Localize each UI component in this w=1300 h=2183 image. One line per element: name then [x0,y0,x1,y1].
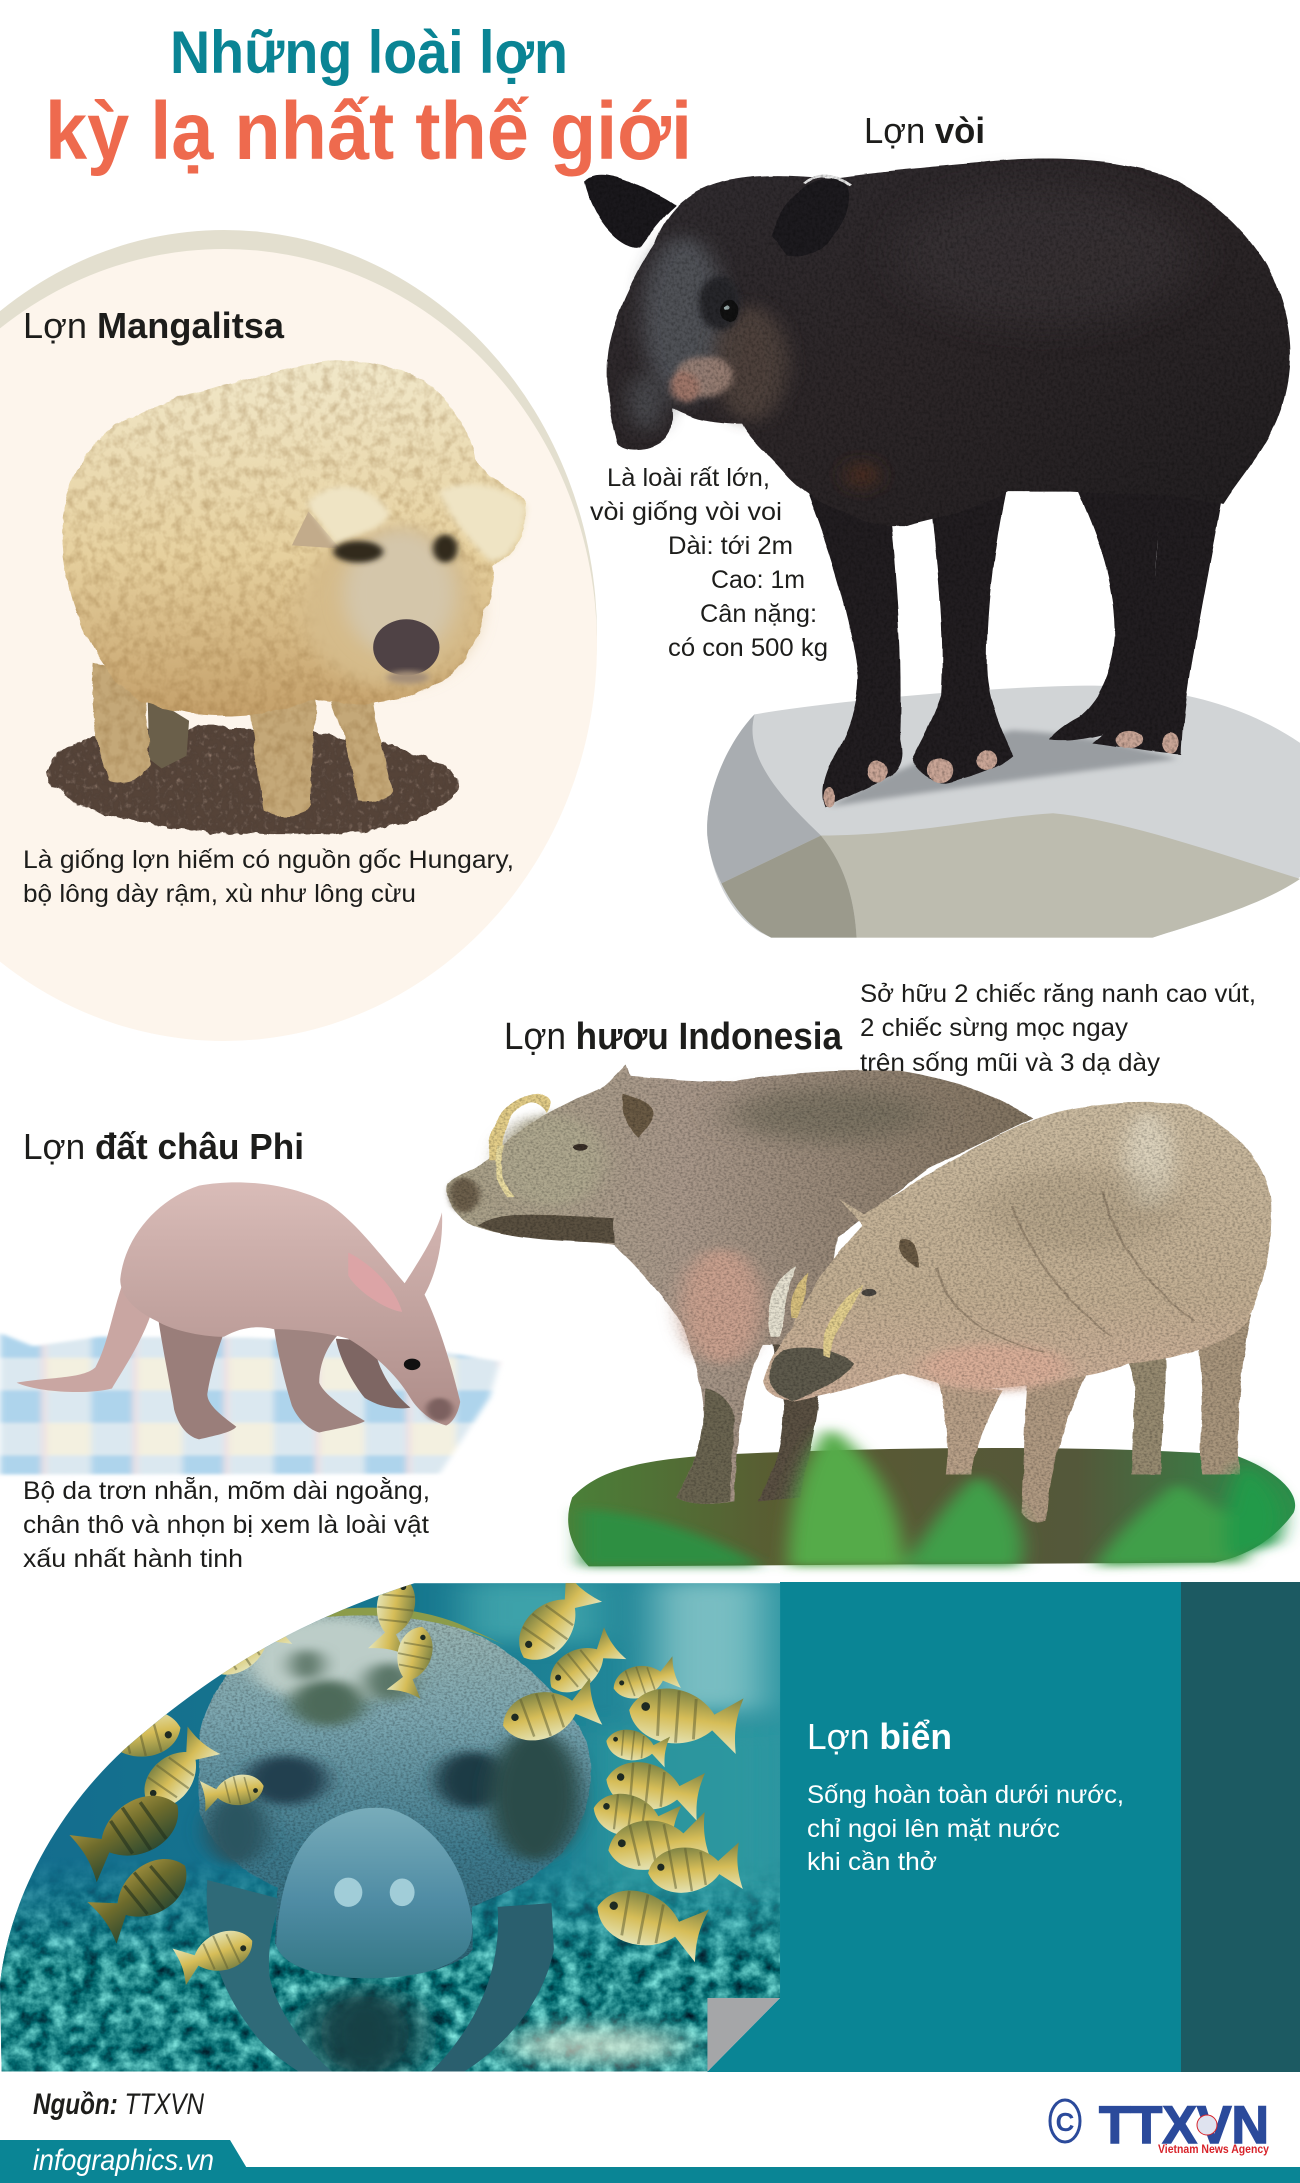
tagline: Vietnam News Agency [1158,2142,1269,2156]
ground [48,727,457,835]
illustration: Mangalitsa pig [48,360,527,835]
site name: infographics.vn [33,2144,214,2177]
footer bar [0,2140,1300,2183]
heading: Lợn biển: Lợn biển [807,1716,952,1757]
details [477,1215,614,1243]
blurred foreground leaves [580,1427,1283,1566]
nostrils [334,1878,415,1907]
text: aardvark description: Bộ da trơn nhẵn, mõm dài ngoằng, [23,1476,430,1505]
blanket [0,1333,500,1475]
wool body [62,360,527,716]
illustration: babirusa pair [447,1065,1295,1566]
aardvark ear, eye, shading [348,1253,453,1421]
text: Mangalitsa description: bộ lông dày rậm, xù như lông cừu [23,880,416,908]
flippers [207,1880,554,2072]
water [0,1580,780,2072]
light rays [307,1580,779,2080]
text: manatee description: Sống hoàn toàn dưới nước, [807,1781,1124,1809]
copyright mark [1050,2100,1080,2142]
tail [17,1283,153,1392]
details [769,1348,854,1402]
logo: TTXVN [1050,2096,1269,2156]
tapir face shading [629,185,1194,489]
aardvark body [120,1182,460,1426]
second leg [759,1337,821,1501]
legs [1128,1352,1166,1475]
agency name: TTXVN [1099,2096,1269,2155]
title line 2: kỳ lạ nhất thế giới [45,86,692,177]
text: tapir description: có con 500 kg [668,634,828,662]
text: tapir description: Cân nặng: [700,600,817,628]
text: tapir description: Dài: tới 2m [668,532,793,560]
face [292,485,527,686]
copyright mark: C [1056,2107,1075,2137]
text: tapir description: Cao: 1m [711,566,805,594]
body [763,1102,1271,1402]
panel: Mangalitsa background ellipse [0,230,597,1041]
front pig [763,1102,1271,1522]
tapir legs [804,472,1223,807]
title [45,19,692,177]
heading: Lợn Mangalitsa: Lợn Mangalitsa [23,305,285,346]
text: babirusa description: 2 chiếc sừng mọc ngay [860,1014,1129,1042]
text: manatee description [807,1781,1124,1876]
hind leg [158,1314,236,1439]
body [447,1065,1032,1504]
text: babirusa description: Sở hữu 2 chiếc răng nanh cao vút, [860,980,1256,1008]
text: babirusa description: trên sống mũi và 3 dạ dày [860,1049,1161,1077]
back pig [447,1065,1032,1504]
front leg [274,1325,365,1432]
text: tapir description [590,464,828,662]
teal panel [780,1582,1181,2072]
dark strip [1181,1582,1300,2072]
wool legs [90,663,392,816]
far front leg [336,1339,410,1408]
seabed [0,1857,780,2072]
panel: Lợn biển [707,1582,1300,2072]
ground [568,1448,1295,1566]
illustration: tapir [585,158,1290,807]
text: Mangalitsa description [23,846,514,908]
tapir ears [585,175,851,256]
title line 1: Những loài lợn [170,19,568,86]
text: tapir description: Là loài rất lớn, [607,464,770,492]
text: manatee description: chỉ ngoi lên mặt nước [807,1815,1060,1843]
snout [276,1808,472,1978]
text: aardvark description: chân thô và nhọn bị xem là loài vật [23,1511,429,1539]
heading: Lợn vòi: Lợn vòi [864,110,985,151]
fish school [69,1572,744,1985]
back texture [205,1608,580,1865]
body [199,1608,591,1978]
illustration: aardvark on blanket [0,1182,500,1475]
text: aardvark description: xấu nhất hành tinh [23,1545,243,1573]
tapir body and head [607,158,1290,526]
text: babirusa description [860,980,1256,1077]
text: Mangalitsa description: Là giống lợn hiếm có nguồn gốc Hungary, [23,846,514,874]
tapir toes [823,731,1179,807]
illustration: rock under tapir [707,686,1300,938]
heading: Lợn hươu Indonesia: Lợn hươu Indonesia [504,1016,843,1058]
back leg [148,695,189,769]
page curl [707,1998,780,2072]
text: manatee description: khi cần thở [807,1848,937,1876]
text: tapir description: vòi giống vòi voi [590,498,782,526]
globe [1197,2115,1217,2135]
heading: Lợn đất châu Phi: Lợn đất châu Phi [23,1126,304,1167]
text: aardvark description [23,1476,430,1573]
source line: Nguồn: TTXVN [33,2088,204,2121]
illustration: manatee underwater photo [0,1580,780,2080]
